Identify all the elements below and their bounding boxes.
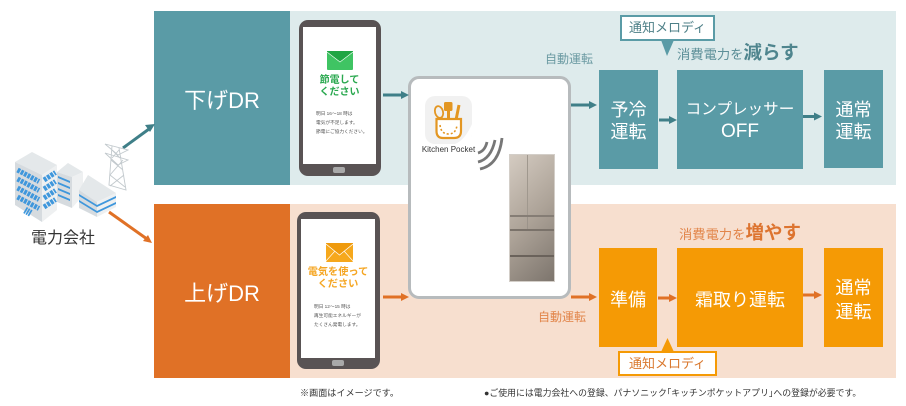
- message heading: ください: [320, 87, 360, 98]
- step: 準備: 準備: [610, 290, 646, 310]
- message body: [314, 304, 361, 327]
- step: 通常運転: 運転: [836, 302, 872, 322]
- message body: たくさん発電します。: [314, 322, 360, 327]
- phone: lower DR message: [299, 20, 381, 176]
- callout: notification melody (raise): [618, 338, 717, 376]
- caption: increase consumption: 消費電力を増やす: [679, 222, 801, 243]
- label: 電力会社: 電力会社: [31, 229, 95, 247]
- message body: 明日 16～18 時は: [316, 111, 352, 116]
- icon: Kitchen Pocket app: [425, 96, 472, 144]
- panel: raise DR band: [154, 204, 896, 378]
- step: 霜取り運転: 霜取り運転: [695, 290, 785, 310]
- callout label: [618, 351, 717, 376]
- step: 通常運転: [824, 248, 883, 347]
- callout pointer: [662, 338, 674, 351]
- phone screen: [303, 27, 376, 164]
- phone home button: [333, 167, 345, 173]
- message heading: 節電して: [320, 75, 359, 86]
- step: 通常運転: [824, 70, 883, 168]
- heading: 上げDR: [154, 204, 290, 378]
- message heading: ください: [318, 279, 358, 290]
- heading: 上げDR: 上げDR: [184, 281, 260, 306]
- message body: 明日 12～15 時は: [314, 304, 350, 308]
- refrigerator: [509, 154, 555, 282]
- label: automatic operation (raise): 自動運転: [538, 310, 586, 324]
- phone: raise DR message: [297, 212, 380, 369]
- callout pointer: [661, 41, 674, 56]
- step: 準備: [599, 248, 657, 347]
- label: automatic operation (lower): 自動運転: [545, 52, 593, 66]
- panel: app and refrigerator card: [408, 76, 571, 299]
- icon: wireless waves: [478, 138, 504, 170]
- phone screen: [301, 219, 375, 358]
- phone home button: [332, 360, 344, 366]
- message heading: 電気を使って: [308, 267, 368, 278]
- step: 予冷運転: 予冷: [610, 100, 646, 120]
- icon: pylon: [105, 144, 128, 190]
- caption: reduce consumption: 消費電力を減らす: [677, 42, 799, 63]
- callout label: 通知メロディ: [629, 20, 706, 35]
- step: コンプレッサーOFF: OFF: [721, 120, 759, 142]
- step: 通常運転: 通常: [836, 278, 872, 298]
- illustration: power company buildings and tower: [15, 144, 129, 247]
- fridge door seams: [527, 155, 528, 215]
- message heading: [320, 74, 360, 98]
- message body: 節電にご協力ください。: [316, 129, 367, 134]
- heading: 下げDR: [154, 11, 290, 185]
- panel: lower DR band: [154, 11, 896, 185]
- icon: orange envelope: [326, 243, 353, 262]
- footnote: registration note: ●ご使用には電力会社への登録、パナソニック｢キッチンポケットアプリ｣への登録が必要です。: [484, 388, 861, 398]
- footnote: image note: ※画面はイメージです。: [300, 388, 399, 398]
- step: 予冷運転: 運転: [610, 122, 646, 142]
- message body: 再生可能エネルギーが: [314, 313, 361, 318]
- step: 通常運転: 運転: [836, 122, 872, 142]
- icon: buildings: [15, 152, 116, 222]
- icon: green envelope: [327, 51, 353, 70]
- step: 予冷運転: [599, 70, 658, 169]
- callout label: [620, 15, 715, 41]
- message body: 電気が不足します。: [316, 120, 358, 125]
- step: コンプレッサーOFF: [677, 70, 803, 169]
- step: 霜取り運転: [677, 248, 803, 347]
- message body: [316, 111, 367, 134]
- callout: notification melody (lower): [620, 15, 715, 56]
- step: コンプレッサーOFF: コンプレッサー: [686, 100, 794, 118]
- callout label: 通知メロディ: [629, 356, 706, 370]
- message heading: [308, 266, 368, 290]
- app name: Kitchen Pocket: [422, 145, 475, 154]
- heading: 下げDR: 下げDR: [184, 88, 260, 113]
- step: 通常運転: 通常: [836, 100, 872, 120]
